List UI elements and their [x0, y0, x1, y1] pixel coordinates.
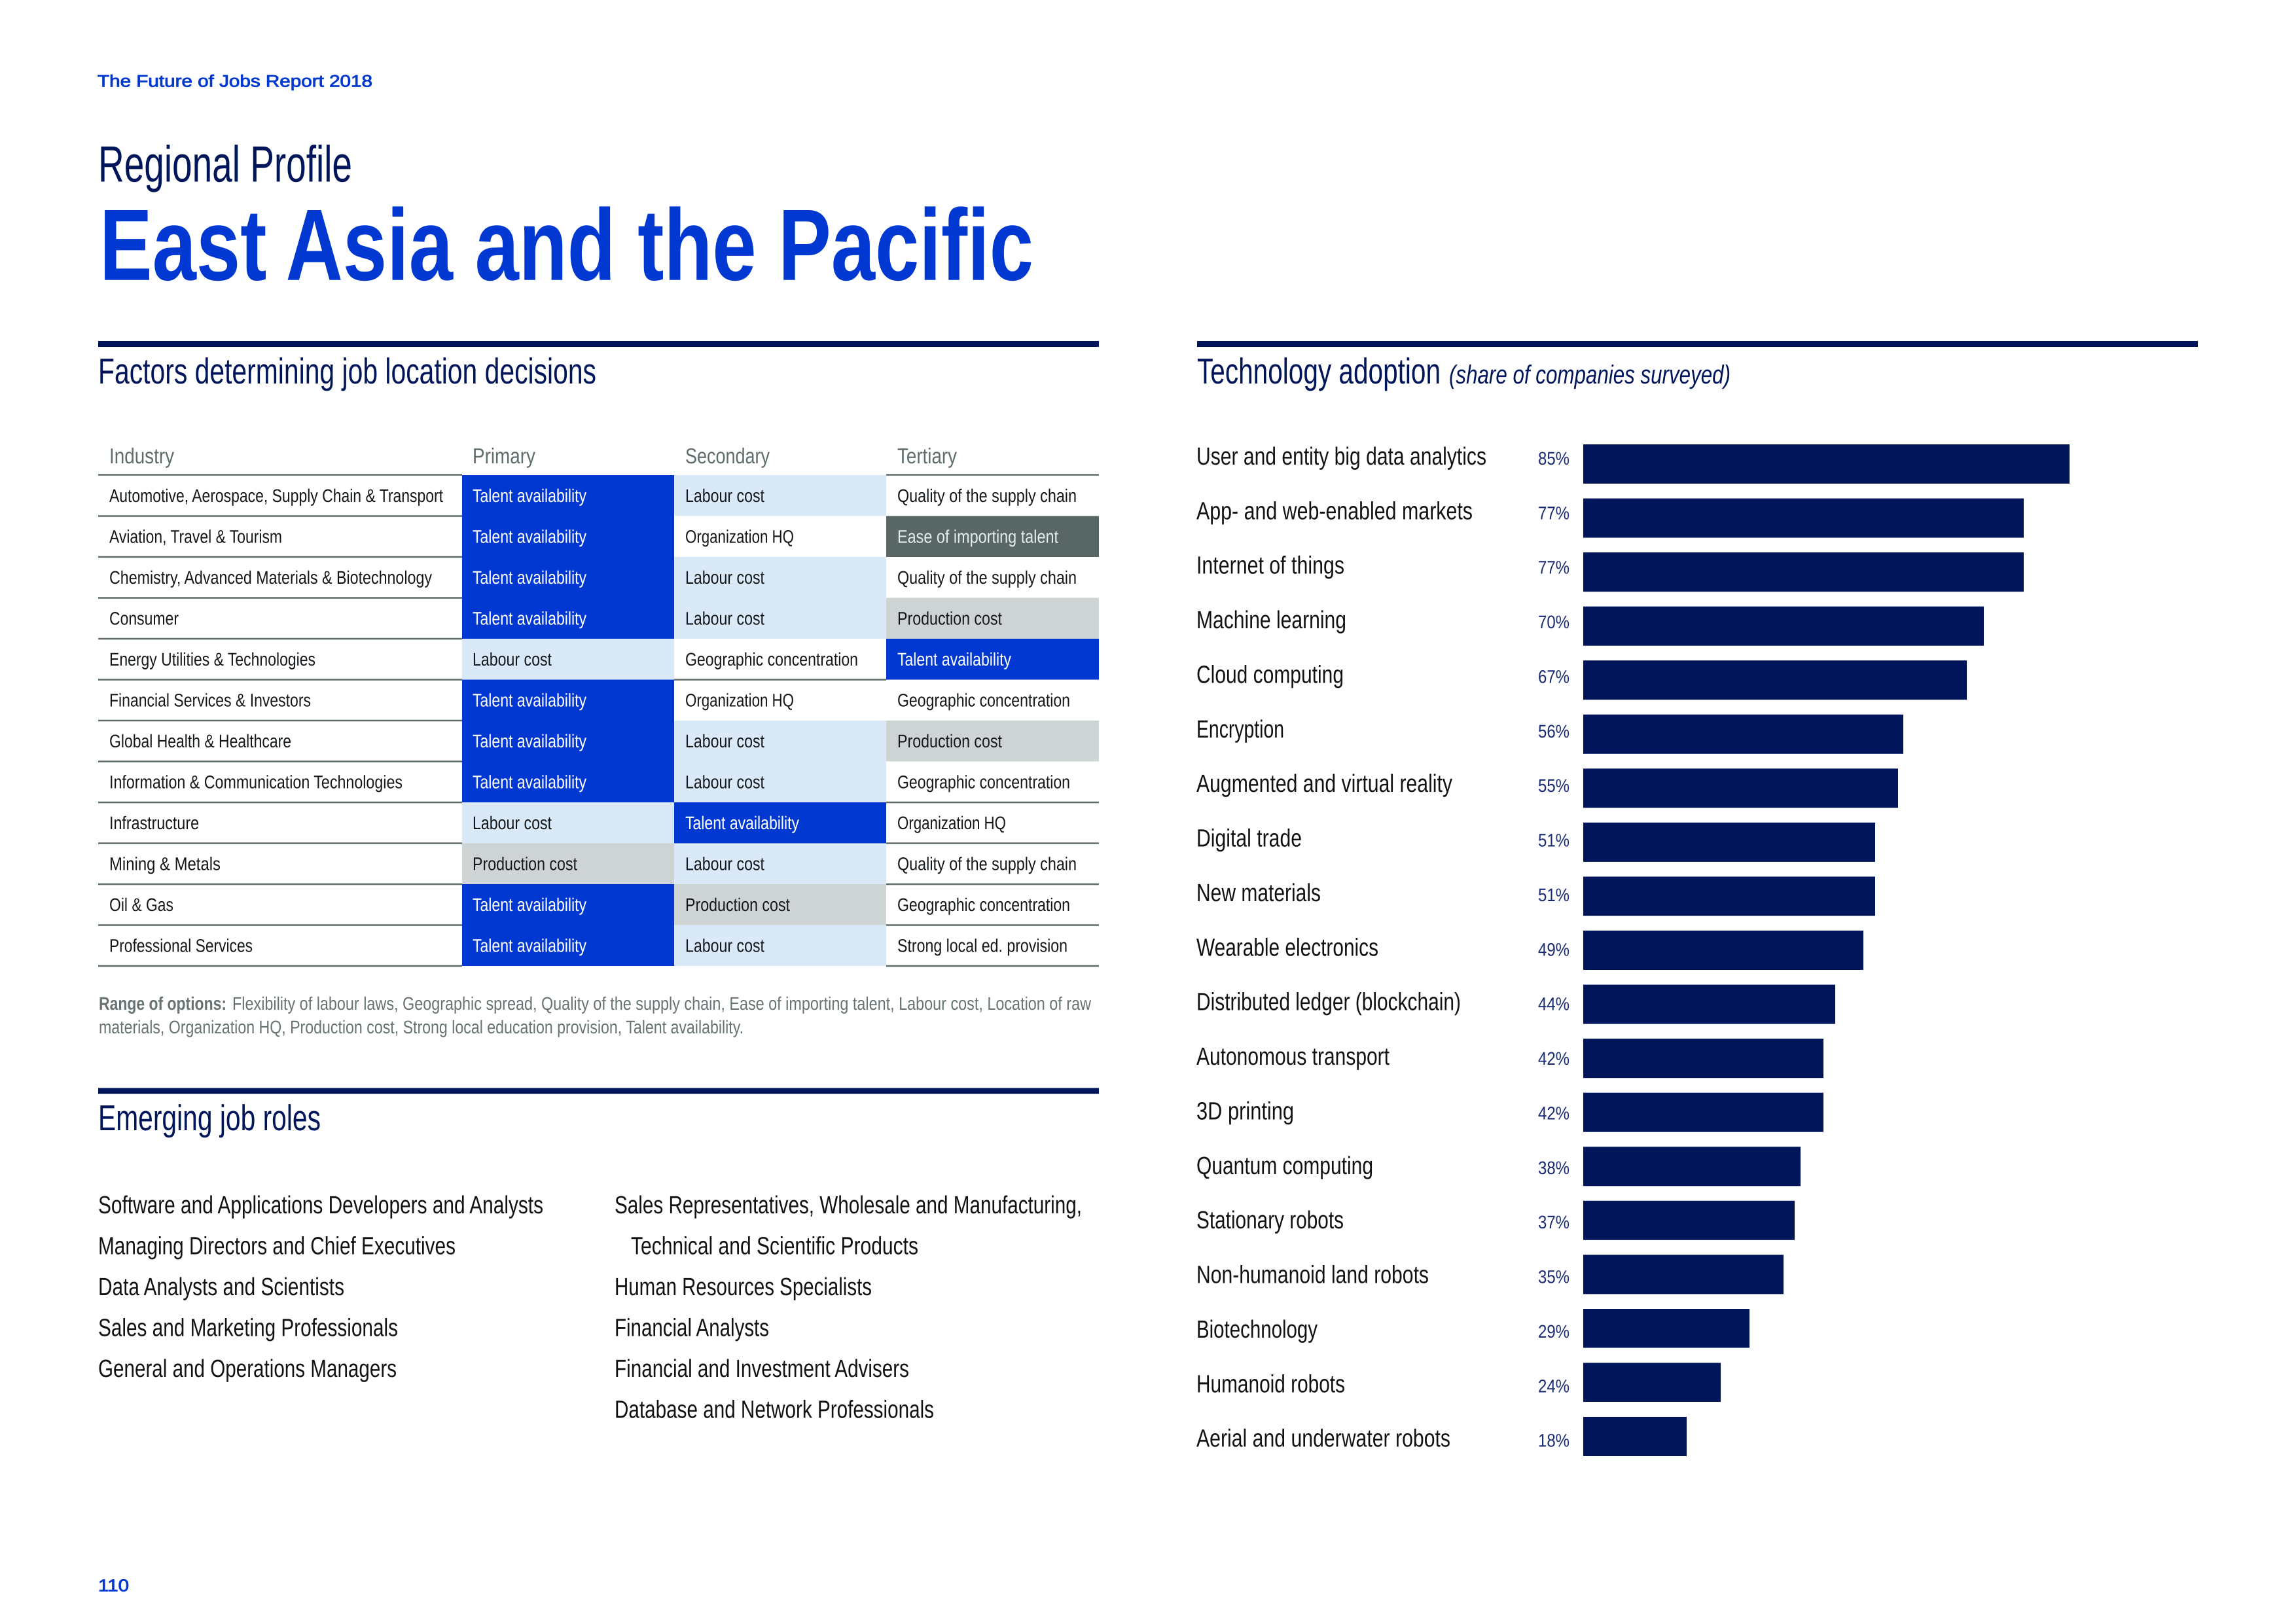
row: Chemistry: Talent availability [473, 567, 586, 588]
bar: Cloud computing 67%: Cloud computing [1196, 661, 1344, 688]
note: range of options: materials, Organization HQ, Production cost, Strong local education provision, Talent availability. [99, 1017, 744, 1037]
bar: Biotechnology 29%: Biotechnology [1196, 1316, 1318, 1344]
job roles list: left column: Data Analysts and Scientists [98, 1274, 344, 1301]
bar: App- and web-enabled markets 77%: 77% [1538, 503, 1570, 523]
row: Oil and Gas [98, 884, 1099, 926]
bar: Distributed ledger (blockchain) 44%: 44% [1538, 994, 1570, 1014]
row: Automotive: Labour cost [685, 486, 764, 506]
panel: emerging job roles [98, 1088, 1099, 1424]
bar: Stationary robots 37%: Stationary robots [1196, 1207, 1344, 1234]
bar: New materials 51% [1196, 877, 1875, 916]
row: Mining and Metals: Labour cost [685, 853, 764, 874]
bar: New materials 51%: New materials [1196, 880, 1321, 907]
heading: technology adoption: (share of companies surveyed) [1449, 361, 1731, 389]
row: Information and Communication Technologies [98, 762, 1099, 803]
row: Consumer [98, 598, 1099, 639]
row: Financial Services [98, 679, 1070, 721]
row: Global Health: Labour cost [685, 731, 764, 751]
bar: Stationary robots 37% [1196, 1201, 1795, 1240]
bar: Cloud computing 67% [1196, 660, 1967, 700]
bar: App- and web-enabled markets 77%: App- and web-enabled markets [1196, 497, 1473, 525]
bar: Encryption 56% [1196, 715, 1903, 754]
row: Oil and Gas: Talent availability [473, 895, 586, 915]
note: range of options [99, 993, 1092, 1037]
row: Global Health: Production cost [897, 731, 1002, 751]
bar: Machine learning 70%: 70% [1538, 612, 1570, 632]
row: Aviation: Aviation, Travel & Tourism [109, 526, 282, 547]
job roles list: left column: General and Operations Managers [98, 1355, 397, 1383]
bar: Internet of things 77%: Internet of things [1196, 552, 1344, 580]
row: Consumer: Talent availability [473, 609, 586, 628]
row: Mining and Metals: Quality of the supply chain [897, 853, 1077, 874]
bar: Augmented and virtual reality 55% [1196, 768, 1898, 808]
row: Aviation: Organization HQ [685, 526, 794, 547]
bar: App- and web-enabled markets 77% [1196, 497, 2024, 538]
heading: emerging job roles: Emerging job roles [98, 1097, 321, 1138]
row: Infrastructure: Infrastructure [109, 813, 199, 833]
bar chart: share of companies surveyed [1196, 443, 2070, 1456]
row: Chemistry [98, 557, 1077, 599]
row: Oil and Gas: Oil & Gas [109, 895, 173, 915]
row: Energy: Energy Utilities & Technologies [109, 649, 315, 669]
title block [98, 135, 1033, 302]
bar: New materials 51%: 51% [1538, 885, 1570, 905]
bar: Quantum computing 38%: Quantum computing [1196, 1152, 1373, 1180]
bar: User and entity big data analytics 85%: 85% [1538, 448, 1570, 469]
row: Chemistry: Labour cost [685, 567, 764, 588]
job roles list: right column: Technical and Scientific Products [631, 1233, 918, 1260]
row: Global Health: Global Health & Healthcare [109, 731, 291, 751]
bar: Wearable electronics 49% [1196, 931, 1863, 970]
bar: User and entity big data analytics 85% [1196, 443, 2070, 484]
bar: Augmented and virtual reality 55%: Augmented and virtual reality [1196, 770, 1452, 798]
bar: Distributed ledger (blockchain) 44%: Distributed ledger (blockchain) [1196, 989, 1461, 1016]
row: Information and Communication Technologies: Geographic concentration [897, 772, 1070, 792]
bar: Aerial and underwater robots 18%: Aerial and underwater robots [1196, 1425, 1450, 1453]
row: Automotive: Talent availability [473, 486, 586, 506]
table header row: Industry [109, 444, 174, 468]
row: Information and Communication Technologies: Talent availability [473, 772, 586, 792]
row: Financial Services: Geographic concentration [897, 690, 1070, 711]
main title: East Asia and the Pacific [99, 188, 1033, 302]
job roles list: left column: Software and Applications Developers and Analysts [98, 1192, 543, 1219]
row: Infrastructure [98, 802, 1099, 844]
row: Financial Services: Organization HQ [685, 690, 794, 711]
row: Professional Services: Labour cost [685, 936, 764, 955]
bar: 3D printing 42%: 42% [1538, 1103, 1570, 1123]
table header row [98, 444, 1099, 476]
bar: Cloud computing 67%: 67% [1538, 666, 1570, 687]
bar: Internet of things 77%: 77% [1538, 558, 1570, 578]
row: Information and Communication Technologies: Information & Communication Technologies [109, 772, 403, 792]
bar: Digital trade 51%: 51% [1538, 830, 1570, 851]
row: Aviation [98, 516, 1099, 558]
job roles list: right column: Database and Network Professionals [615, 1397, 934, 1424]
row: Energy: Labour cost [473, 649, 552, 669]
bar: Humanoid robots 24%: 24% [1538, 1376, 1570, 1396]
job roles list: right column: Financial Analysts [615, 1314, 769, 1342]
job roles list: right column: Sales Representatives, Wholesale and Manufacturing, [615, 1192, 1082, 1219]
row: Financial Services: Talent availability [473, 690, 586, 711]
heading: factors: Factors determining job location decisions [98, 351, 596, 391]
bar: Machine learning 70%: Machine learning [1196, 607, 1346, 634]
bar: Internet of things 77% [1196, 552, 2024, 592]
job roles list: left column [98, 1192, 543, 1383]
row: Mining and Metals [98, 843, 1099, 885]
bar: Non-humanoid land robots 35%: 35% [1538, 1267, 1570, 1287]
row: Aviation: Ease of importing talent [897, 526, 1058, 547]
job roles list: left column: Managing Directors and Chief Executives [98, 1233, 456, 1260]
note: range of options: Range of options: [99, 993, 226, 1014]
bar: Stationary robots 37%: 37% [1538, 1212, 1570, 1232]
bar: Augmented and virtual reality 55%: 55% [1538, 776, 1570, 796]
row: Energy [98, 639, 1099, 681]
row: Professional Services [98, 925, 1099, 967]
heading: technology adoption: Technology adoption [1197, 351, 1441, 391]
row: Consumer: Consumer [109, 609, 179, 628]
table header row: Secondary [685, 444, 770, 468]
bar: Biotechnology 29%: 29% [1538, 1321, 1570, 1342]
running header: The Future of Jobs Report 2018 [98, 72, 372, 90]
row: Professional Services: Strong local ed. provision [897, 936, 1067, 955]
row: Oil and Gas: Production cost [685, 895, 790, 915]
bar: Autonomous transport 42%: Autonomous transport [1196, 1043, 1390, 1071]
bar: Quantum computing 38%: 38% [1538, 1158, 1570, 1178]
bar: Humanoid robots 24% [1196, 1363, 1721, 1402]
heading: technology adoption [1197, 351, 1731, 391]
bar: Non-humanoid land robots 35%: Non-humanoid land robots [1196, 1262, 1429, 1289]
row: Information and Communication Technologies: Labour cost [685, 772, 764, 792]
note: range of options: Flexibility of labour laws, Geographic spread, Quality of the supply chain, Ease of importing talent, Labour cost, Location of raw [232, 993, 1092, 1014]
panel: technology adoption [1196, 341, 2198, 1456]
bar: Wearable electronics 49%: 49% [1538, 939, 1570, 959]
row: Global Health: Talent availability [473, 731, 586, 751]
bar: Digital trade 51%: Digital trade [1196, 825, 1302, 853]
row: Consumer: Production cost [897, 609, 1002, 628]
row: Mining and Metals: Production cost [473, 853, 577, 874]
table header row: Primary [473, 444, 535, 468]
row: Chemistry: Quality of the supply chain [897, 567, 1077, 588]
row: Financial Services: Financial Services & Investors [109, 690, 311, 711]
row: Automotive: Quality of the supply chain [897, 486, 1077, 506]
row: Automotive [98, 475, 1077, 517]
row: Energy: Talent availability [897, 649, 1011, 669]
table header row: Tertiary [897, 444, 957, 468]
row: Mining and Metals: Mining & Metals [109, 853, 221, 874]
bar: 3D printing 42% [1196, 1093, 1823, 1132]
row: Oil and Gas: Geographic concentration [897, 895, 1070, 915]
bar: Wearable electronics 49%: Wearable electronics [1196, 934, 1378, 961]
row: Global Health [98, 721, 1099, 762]
row: Infrastructure: Labour cost [473, 813, 552, 833]
row: Energy: Geographic concentration [685, 649, 858, 669]
bar: User and entity big data analytics 85%: User and entity big data analytics [1196, 443, 1486, 471]
row: Chemistry: Chemistry, Advanced Materials & Biotechnology [109, 567, 432, 588]
bar: Autonomous transport 42% [1196, 1039, 1823, 1078]
page number: 110 [98, 1576, 129, 1596]
panel: factors determining job location decisions [98, 341, 1099, 1037]
bar: Machine learning 70% [1196, 607, 1984, 646]
bar: Encryption 56%: 56% [1538, 721, 1570, 741]
row: Automotive: Automotive, Aerospace, Supply Chain & Transport [109, 486, 443, 506]
bar: Digital trade 51% [1196, 823, 1875, 862]
job roles list: right column [615, 1192, 1082, 1424]
bar: Quantum computing 38% [1196, 1147, 1801, 1186]
row: Infrastructure: Organization HQ [897, 813, 1006, 833]
job roles list: right column: Human Resources Specialists [615, 1274, 872, 1301]
job roles list: right column: Financial and Investment Advisers [615, 1355, 909, 1383]
row: Aviation: Talent availability [473, 526, 586, 547]
row: Professional Services: Talent availability [473, 936, 586, 955]
bar: Non-humanoid land robots 35% [1196, 1255, 1784, 1294]
row: Consumer: Labour cost [685, 609, 764, 628]
bar: Autonomous transport 42%: 42% [1538, 1048, 1570, 1069]
bar: Distributed ledger (blockchain) 44% [1196, 985, 1835, 1024]
bar: Aerial and underwater robots 18% [1196, 1417, 1687, 1456]
row: Professional Services: Professional Services [109, 936, 253, 955]
bar: Humanoid robots 24%: Humanoid robots [1196, 1370, 1345, 1398]
table: factors by industry [98, 444, 1099, 967]
bar: Biotechnology 29% [1196, 1309, 1749, 1348]
job roles list: left column: Sales and Marketing Professionals [98, 1314, 398, 1342]
row: Infrastructure: Talent availability [685, 813, 799, 833]
bar: 3D printing 42%: 3D printing [1196, 1097, 1294, 1125]
bar: Aerial and underwater robots 18%: 18% [1538, 1431, 1570, 1451]
subtitle: Regional Profile: Regional Profile [98, 135, 352, 193]
bar: Encryption 56%: Encryption [1196, 716, 1284, 743]
